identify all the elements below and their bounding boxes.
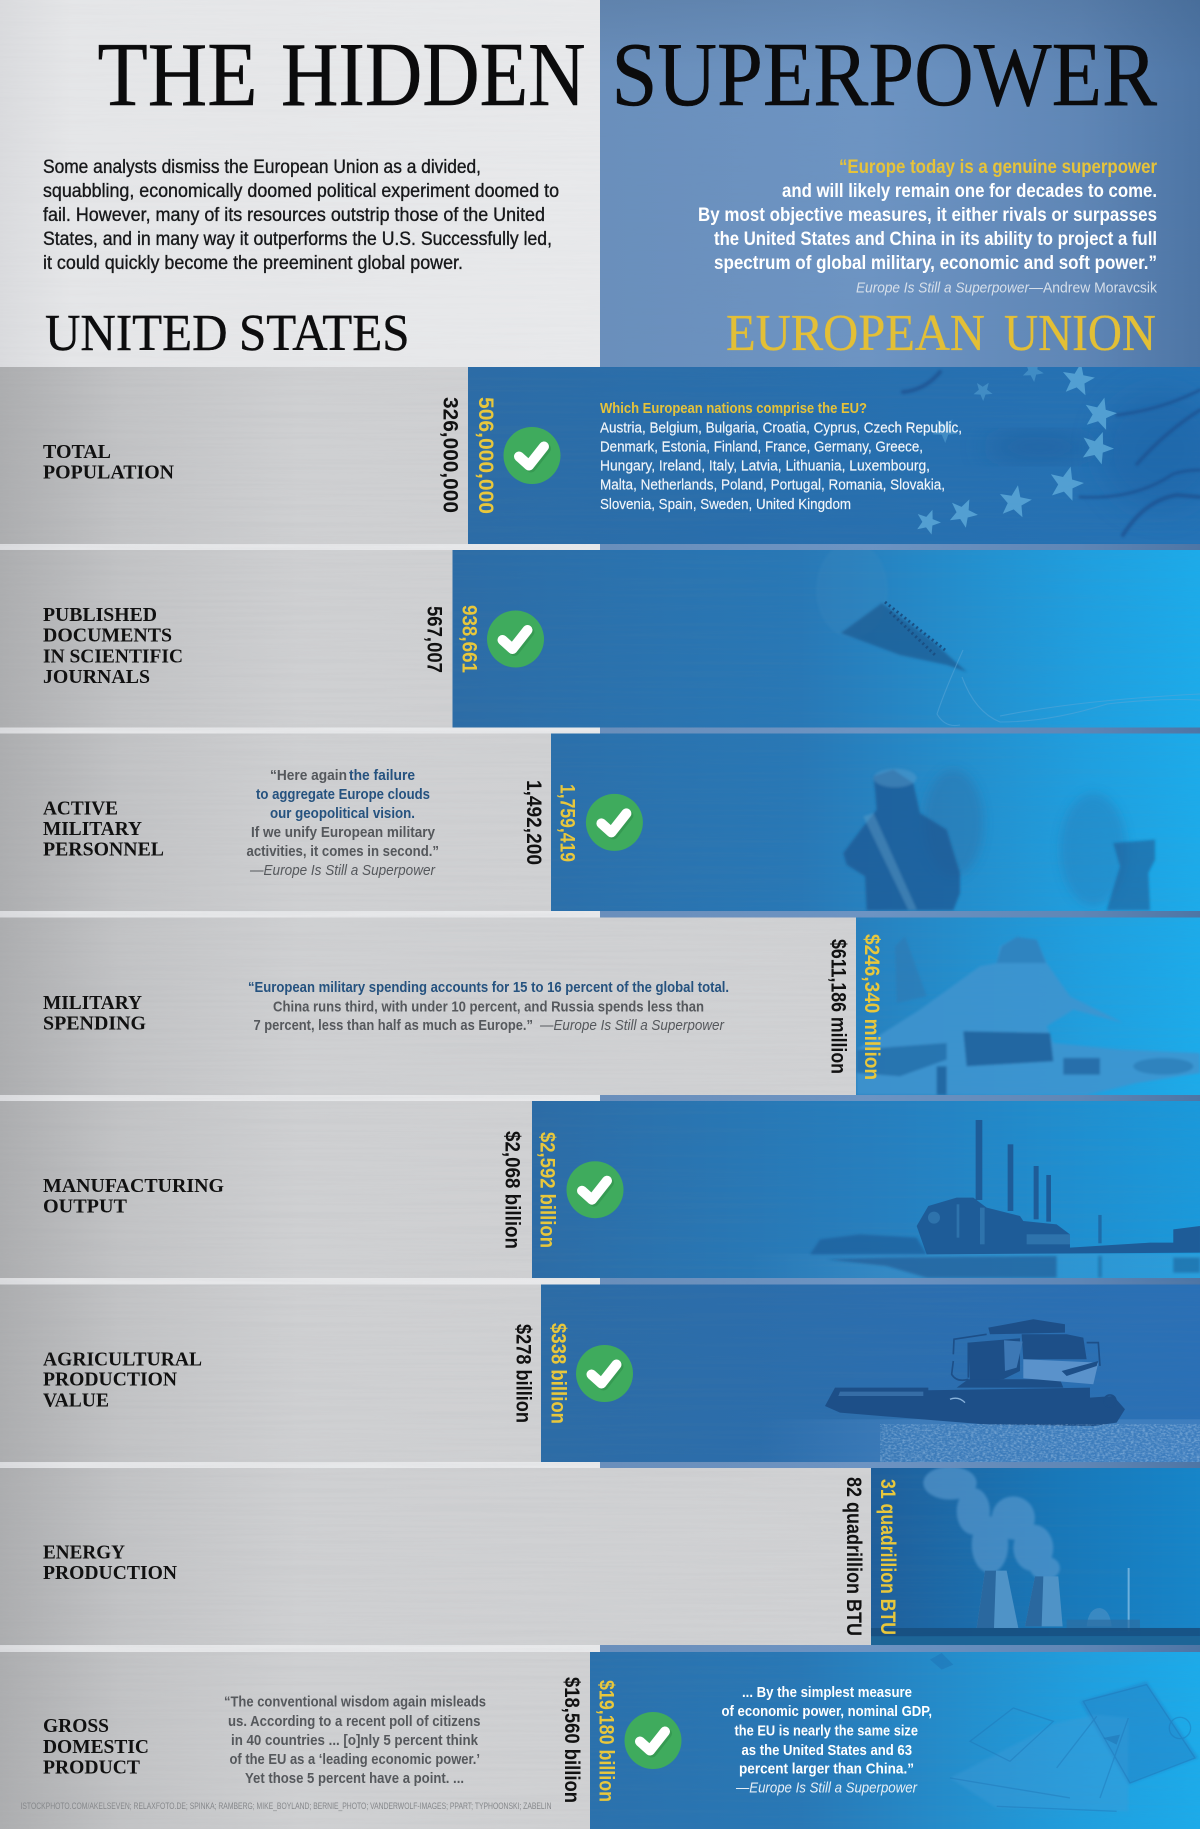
label: energy production: PRODUCTION <box>43 1562 177 1584</box>
intro text block: squabbling, economically doomed political experiment doomed to <box>43 181 559 202</box>
quote: failure to aggregate: activities, it comes in second.” <box>246 843 439 860</box>
photo: pen drawing a chart <box>842 601 1200 726</box>
values: total population <box>438 397 497 514</box>
quote: conventional wisdom: Yet those 5 percent have a point. ... <box>245 1770 464 1787</box>
quote: nominal GDP: the EU is nearly the same size <box>734 1722 918 1740</box>
values: total population: 326,000,000 <box>438 397 462 513</box>
heading: United States: UNITED <box>45 305 228 362</box>
icon: check, agriculture <box>576 1345 633 1402</box>
quote: failure to aggregate: the failure <box>349 767 415 784</box>
icon: check, military personnel <box>586 794 643 851</box>
quote: conventional wisdom <box>224 1694 486 1787</box>
pull quote: Moravcsik: and will likely remain one for decades to come. <box>782 181 1157 202</box>
quote: nominal GDP: —Europe Is Still a Superpower <box>735 1780 918 1796</box>
values: scientific documents: 938,661 <box>458 605 481 673</box>
EU member list: Austria, Belgium, Bulgaria, Croatia, Cyprus, Czech Republic, <box>600 420 962 436</box>
row: scientific documents <box>0 550 1200 728</box>
icon: check, scientific documents <box>487 610 544 668</box>
label: published documents <box>43 604 183 688</box>
icon: check, GDP <box>624 1712 682 1769</box>
label: military spending: SPENDING <box>43 1012 146 1034</box>
label: published documents: PUBLISHED <box>43 604 157 626</box>
title: SUPERPOWER <box>612 24 1157 125</box>
label: agricultural production value: PRODUCTION <box>43 1369 177 1391</box>
values: total population: 506,000,000 <box>474 397 497 514</box>
intro text block <box>43 157 559 274</box>
EU member list: Denmark, Estonia, Finland, France, Germany, Greece, <box>600 438 923 456</box>
quote: conventional wisdom: in 40 countries ... [o]nly 5 percent think <box>231 1732 479 1749</box>
label: active military personnel <box>43 797 164 861</box>
EU member list: Hungary, Ireland, Italy, Latvia, Lithuania, Luxembourg, <box>600 458 930 474</box>
row: manufacturing <box>0 1101 1200 1278</box>
row: military personnel <box>0 734 1200 911</box>
photo: combine harvester <box>825 1319 1200 1462</box>
pull quote: Moravcsik: —Andrew Moravcsik <box>1029 280 1158 296</box>
values: scientific documents <box>423 605 481 673</box>
label: manufacturing output: MANUFACTURING <box>43 1175 224 1197</box>
icon: check, total population <box>504 427 560 484</box>
page background: blue EU half <box>600 0 1200 1829</box>
values: GDP: $19,180 billion <box>594 1680 618 1802</box>
title: THE <box>98 24 258 125</box>
label: gross domestic product <box>43 1715 149 1779</box>
label: agricultural production value <box>43 1348 202 1412</box>
label: manufacturing output: OUTPUT <box>43 1196 127 1218</box>
quote: failure to aggregate: to aggregate Europe clouds <box>256 786 430 803</box>
quote: nominal GDP: percent larger than China.” <box>739 1760 914 1778</box>
values: agriculture <box>512 1323 570 1424</box>
values: agriculture: $278 billion <box>512 1324 534 1423</box>
title <box>98 24 1157 125</box>
values: military spending <box>827 934 883 1080</box>
quote: nominal GDP <box>722 1684 932 1796</box>
values: energy: 82 quadrillion BTU <box>842 1477 865 1636</box>
label: energy production: ENERGY <box>43 1542 125 1564</box>
quote: military spending: “European military spending accounts for 15 to 16 percent of the global total. <box>248 979 729 996</box>
quote: failure to aggregate <box>246 767 439 879</box>
intro text block: States, and in many way it outperforms the U.S. Successfully led, <box>43 229 552 250</box>
photo credits: ISTOCKPHOTO.COM/AKELSEVEN; RELAXFOTO.DE; SPINKA; RAMBERG; MIKE_BOYLAND; BERNIE_PHOTO; VANDERWOLF-IMAGES; PPART; TYPHOONSKI; ZABELIN <box>20 1801 552 1812</box>
label: published documents: JOURNALS <box>43 666 150 688</box>
label: manufacturing output <box>43 1175 224 1218</box>
label: energy production <box>43 1542 177 1584</box>
values: manufacturing <box>500 1131 558 1249</box>
values: manufacturing: $2,068 billion <box>500 1131 524 1249</box>
photo: nuclear plant cooling towers <box>870 1466 1200 1646</box>
photo: fighter jet <box>857 936 1200 1095</box>
pull quote: Moravcsik: spectrum of global military, economic and soft power.” <box>714 253 1157 274</box>
label: agricultural production value: VALUE <box>43 1390 109 1412</box>
heading: European Union: EUROPEAN <box>726 305 985 362</box>
heading: United States: STATES <box>239 305 410 362</box>
values: military personnel: 1,759,419 <box>556 784 579 862</box>
label: published documents: IN SCIENTIFIC <box>43 645 183 667</box>
pull quote: Moravcsik: By most objective measures, it either rivals or surpasses <box>698 205 1157 226</box>
label: total population <box>43 441 174 484</box>
quote: conventional wisdom: of the EU as a ‘leading economic power.’ <box>230 1751 480 1768</box>
heading: European Union <box>726 305 1156 362</box>
label: total population: TOTAL <box>43 441 111 463</box>
EU member list: Malta, Netherlands, Poland, Portugal, Romania, Slovakia, <box>600 476 945 494</box>
heading: United States <box>45 305 410 362</box>
row: military spending <box>0 918 1200 1095</box>
photo: euro banknotes <box>930 1653 1198 1811</box>
quote: military spending: China runs third, with under 10 percent, and Russia spends less than <box>273 998 704 1016</box>
label: gross domestic product: PRODUCT <box>43 1757 140 1779</box>
values: military spending: $246,340 million <box>860 934 883 1080</box>
heading: European Union: UNION <box>1004 305 1156 362</box>
pull quote: Moravcsik <box>698 157 1158 296</box>
icon: check, manufacturing <box>566 1161 624 1218</box>
label: active military personnel: ACTIVE <box>43 797 118 819</box>
quote: failure to aggregate: —Europe Is Still a Superpower <box>249 862 436 879</box>
quote: conventional wisdom: us. According to a recent poll of citizens <box>228 1713 480 1730</box>
intro text block: Some analysts dismiss the European Union as a divided, <box>43 157 481 178</box>
EU member list: Slovenia, Spain, Sweden, United Kingdom <box>600 496 851 513</box>
label: gross domestic product: DOMESTIC <box>43 1736 149 1758</box>
pull quote: Moravcsik: Europe Is Still a Superpower <box>856 280 1030 296</box>
quote: military spending <box>248 979 729 1034</box>
quote: nominal GDP: as the United States and 63 <box>742 1742 912 1759</box>
label: published documents: DOCUMENTS <box>43 625 172 647</box>
row: total population <box>0 367 1200 544</box>
values: manufacturing: $2,592 billion <box>536 1132 558 1248</box>
photo: soldiers <box>843 769 1155 910</box>
EU member list <box>600 400 962 513</box>
quote: failure to aggregate: our geopolitical vision. <box>270 805 415 822</box>
label: gross domestic product: GROSS <box>43 1715 109 1737</box>
page background: light U.S. half <box>0 0 600 1829</box>
intro text block: it could quickly become the preeminent global power. <box>43 253 463 274</box>
quote: nominal GDP: ... By the simplest measure <box>742 1684 912 1701</box>
quote: conventional wisdom: “The conventional wisdom again misleads <box>224 1694 486 1710</box>
values: agriculture: $338 billion <box>546 1323 570 1424</box>
label: active military personnel: MILITARY <box>43 818 142 840</box>
photo: power plant on water <box>811 1120 1200 1278</box>
quote: military spending: 7 percent, less than half as much as Europe.” <box>254 1017 533 1034</box>
row labels <box>43 441 224 1779</box>
values: military personnel: 1,492,200 <box>522 780 545 865</box>
label: total population: POPULATION <box>43 462 174 484</box>
row: energy <box>0 1468 1200 1645</box>
label: active military personnel: PERSONNEL <box>43 839 164 861</box>
intro text block: fail. However, many of its resources outstrip those of the United <box>43 205 545 226</box>
label: agricultural production value: AGRICULTURAL <box>43 1348 202 1370</box>
quote: nominal GDP: of economic power, nominal GDP, <box>722 1703 932 1720</box>
label: military spending <box>43 992 146 1034</box>
values: military spending: $611,186 million <box>827 939 850 1074</box>
pull quote: Moravcsik: “Europe today is a genuine superpower <box>839 157 1158 178</box>
values: military personnel <box>522 780 579 865</box>
row: agriculture <box>0 1284 1200 1462</box>
EU member list: Which European nations comprise the EU? <box>600 400 867 417</box>
values: energy: 31 quadrillion BTU <box>876 1479 899 1635</box>
row: GDP <box>0 1652 1200 1829</box>
label: military spending: MILITARY <box>43 992 142 1014</box>
quote: failure to aggregate: “Here again <box>270 767 347 784</box>
quote: military spending: —Europe Is Still a Superpower <box>539 1017 725 1034</box>
photo: EU flag <box>903 356 1200 536</box>
title: HIDDEN <box>281 24 586 125</box>
values: GDP <box>560 1677 618 1803</box>
values: scientific documents: 567,007 <box>423 606 446 673</box>
values: GDP: $18,560 billion <box>560 1677 583 1803</box>
values: energy <box>842 1477 899 1636</box>
quote: failure to aggregate: If we unify European military <box>251 824 436 841</box>
